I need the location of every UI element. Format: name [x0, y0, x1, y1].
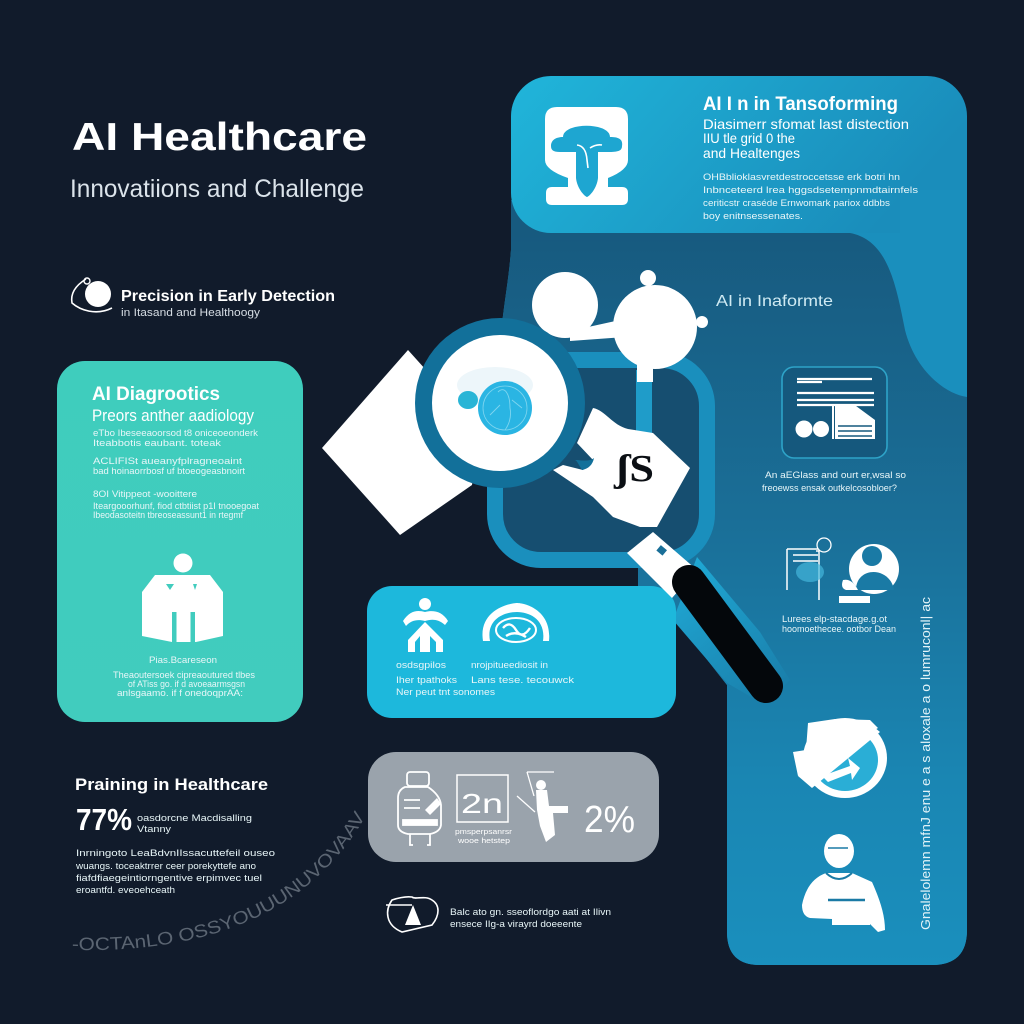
callout text: ensece IIg-a virayrd doeeente: [450, 919, 582, 930]
caption: doctor: Lurees elp-stacdage.g.ot: [782, 614, 887, 625]
statistic caption: oasdorcne Macdisalling: [137, 813, 252, 824]
subheading: radiology: Preors anther aadiology: [92, 406, 254, 425]
body text: top card: boy enitnsessenates.: [703, 211, 803, 222]
statistic caption: Vtanny: [137, 824, 171, 835]
cyan card captions: Ner peut tnt sonomes: [396, 687, 495, 698]
title: AI Healthcare: [72, 116, 367, 159]
heading: middle right: AI in Inaformte: [716, 293, 833, 310]
body text: training: [75, 848, 275, 896]
heading: precision: Precision in Early Detection: [121, 288, 335, 305]
caption: doctor: [782, 614, 896, 635]
subheading: top card: and Healtenges: [703, 145, 800, 161]
illustration: stethoscope earpieces: [532, 270, 708, 382]
caption: diagnostics: [113, 655, 255, 699]
heading: AI diagnostics: AI Diagrootics: [92, 384, 220, 405]
caption: report: An aEGlass and ourt er,wsal so: [765, 470, 906, 481]
body text: diagnostics: bad hoinaorrbosf uf btoeogeasbnoirt: [93, 466, 245, 477]
icon: cyan scan: [458, 381, 532, 435]
panel: cyan card: [367, 586, 676, 718]
body text: diagnostics: Iteargooorhunf, fiod ctbtiist p1I tnooegoat: [93, 501, 259, 512]
icon: brain scan: [482, 603, 549, 642]
icon: globe with slash: [793, 718, 887, 798]
icon: device backpack: [398, 772, 441, 845]
cyan card captions: nrojpitueediosit in: [471, 660, 548, 671]
section: precision in early detection: [72, 278, 335, 319]
icon: chart box: wooe hetstep: [457, 836, 510, 845]
icon: document and doctor: [787, 538, 899, 603]
body text: diagnostics: ACLIFISt aueanyfplragneoaint: [93, 456, 242, 467]
caption: precision: in Itasand and Healthoogy: [121, 307, 261, 319]
ghost curved text: -OCTAnLO OSSYOUUUNUVOVAAV: [72, 810, 362, 950]
caption: doctor: hoomoethecee. ootbor Dean: [782, 624, 896, 635]
icon: report box: [782, 367, 887, 458]
statistic: 77%: 77%: [76, 802, 132, 837]
icon: figure: [517, 772, 568, 842]
illustration: magnifier handle: [627, 532, 766, 686]
icon: chart box: [455, 775, 513, 845]
vertical side text: Gnalelolemn mfnJ enu e a s aloxale a o lumruconl| ac: [918, 596, 933, 930]
icon: anatomy figure: [403, 598, 448, 652]
panel: AI diagnostics: [57, 361, 303, 722]
callout text: [450, 907, 611, 930]
note: bottom callout: [386, 897, 611, 932]
body text: training: Inrningoto LeaBdvnIIssacuttefeil ouseo: [76, 848, 275, 859]
caption: diagnostics: of ATiss go. if d avoeaarmsgsn: [128, 679, 245, 690]
heading: training: Praining in Healthcare: [75, 775, 268, 794]
icon: patient figure: [142, 554, 223, 644]
icon: chart box: pmsperpsanrsr: [455, 827, 513, 836]
panel: gray statistics card: [368, 752, 659, 862]
subheading: top card: Diasimerr sfomat last distection: [703, 116, 909, 132]
subheading: top card: IIU tle grid 0 the: [703, 130, 795, 146]
icon: hand and star: [386, 897, 438, 932]
statistic caption: [137, 813, 252, 835]
section: training in healthcare: [75, 775, 275, 896]
callout text: Balc ato gn. sseoflordgo aati at Ilivn: [450, 907, 611, 918]
illustration: magnifier: [415, 318, 600, 488]
cyan card captions: Iher tpathoks: [396, 675, 457, 686]
body text: diagnostics: eTbo Ibeseeaoorsod t8 oniceoeonderk: [93, 428, 258, 439]
body text: training: eroantfd. eveoehceath: [76, 885, 175, 896]
illustration: white document: [322, 350, 480, 535]
body text: diagnostics: 8OI Vitippeot -wooittere: [93, 489, 197, 500]
caption: report: freoewss ensak outkelcosobloer?: [762, 483, 897, 494]
caption: diagnostics: Pias.Bcareseon: [149, 655, 217, 666]
subtitle: Innovatiions and Challenge: [70, 175, 364, 203]
body text: top card: Inbnceteerd lrea hggsdsetempnmdtairnfels: [703, 185, 918, 196]
statistic: 2%: 2%: [584, 799, 635, 841]
body text: top card: ceriticstr craséde Ernwomark pariox ddbbs: [703, 198, 890, 209]
icon: presenter person: [802, 834, 885, 932]
cyan card captions: [396, 660, 574, 698]
illustration: handle band: [673, 557, 790, 705]
body text: top card: OHBblioklasvretdestroccetsse erk botri hn: [703, 172, 900, 183]
body text: diagnostics: Iteabbotis eaubant. toteak: [93, 438, 221, 449]
icon: detection: [72, 278, 112, 312]
body text: training: fiafdfiaegeintiorngentive erpimvec tuel: [76, 873, 262, 884]
body text: training: wuangs. toceaktrrer ceer porekyttefe ano: [75, 861, 256, 872]
icon: head and shoulders: [545, 107, 628, 205]
heading: top card: AI I n in Tansoforming: [703, 94, 898, 115]
caption: diagnostics: Theaoutersoek cipreaoutured tlbes: [113, 670, 255, 681]
illustration: hand: [553, 408, 690, 527]
glyphs on hand: ʃS: [613, 448, 654, 490]
icon: chart box: 2n: [461, 788, 503, 819]
body text: diagnostics: [93, 428, 259, 521]
illustration: stethoscope ring: [495, 360, 707, 560]
body text: top card: [703, 172, 918, 222]
subheading: top card: [703, 116, 909, 161]
stem: [636, 370, 652, 450]
panel: top card: [511, 76, 967, 233]
panel: right blue column: [500, 200, 967, 965]
caption: diagnostics: anlsgaamo. if f onedoqprAA:: [117, 688, 243, 699]
body text: diagnostics: Ibeodasoteitn tbreoseassunt1 in rtegmf: [93, 510, 243, 521]
cyan card captions: Lans tese. tecouwck: [471, 675, 574, 686]
caption: report: [762, 470, 906, 494]
cyan card captions: osdsgpilos: [396, 660, 446, 671]
